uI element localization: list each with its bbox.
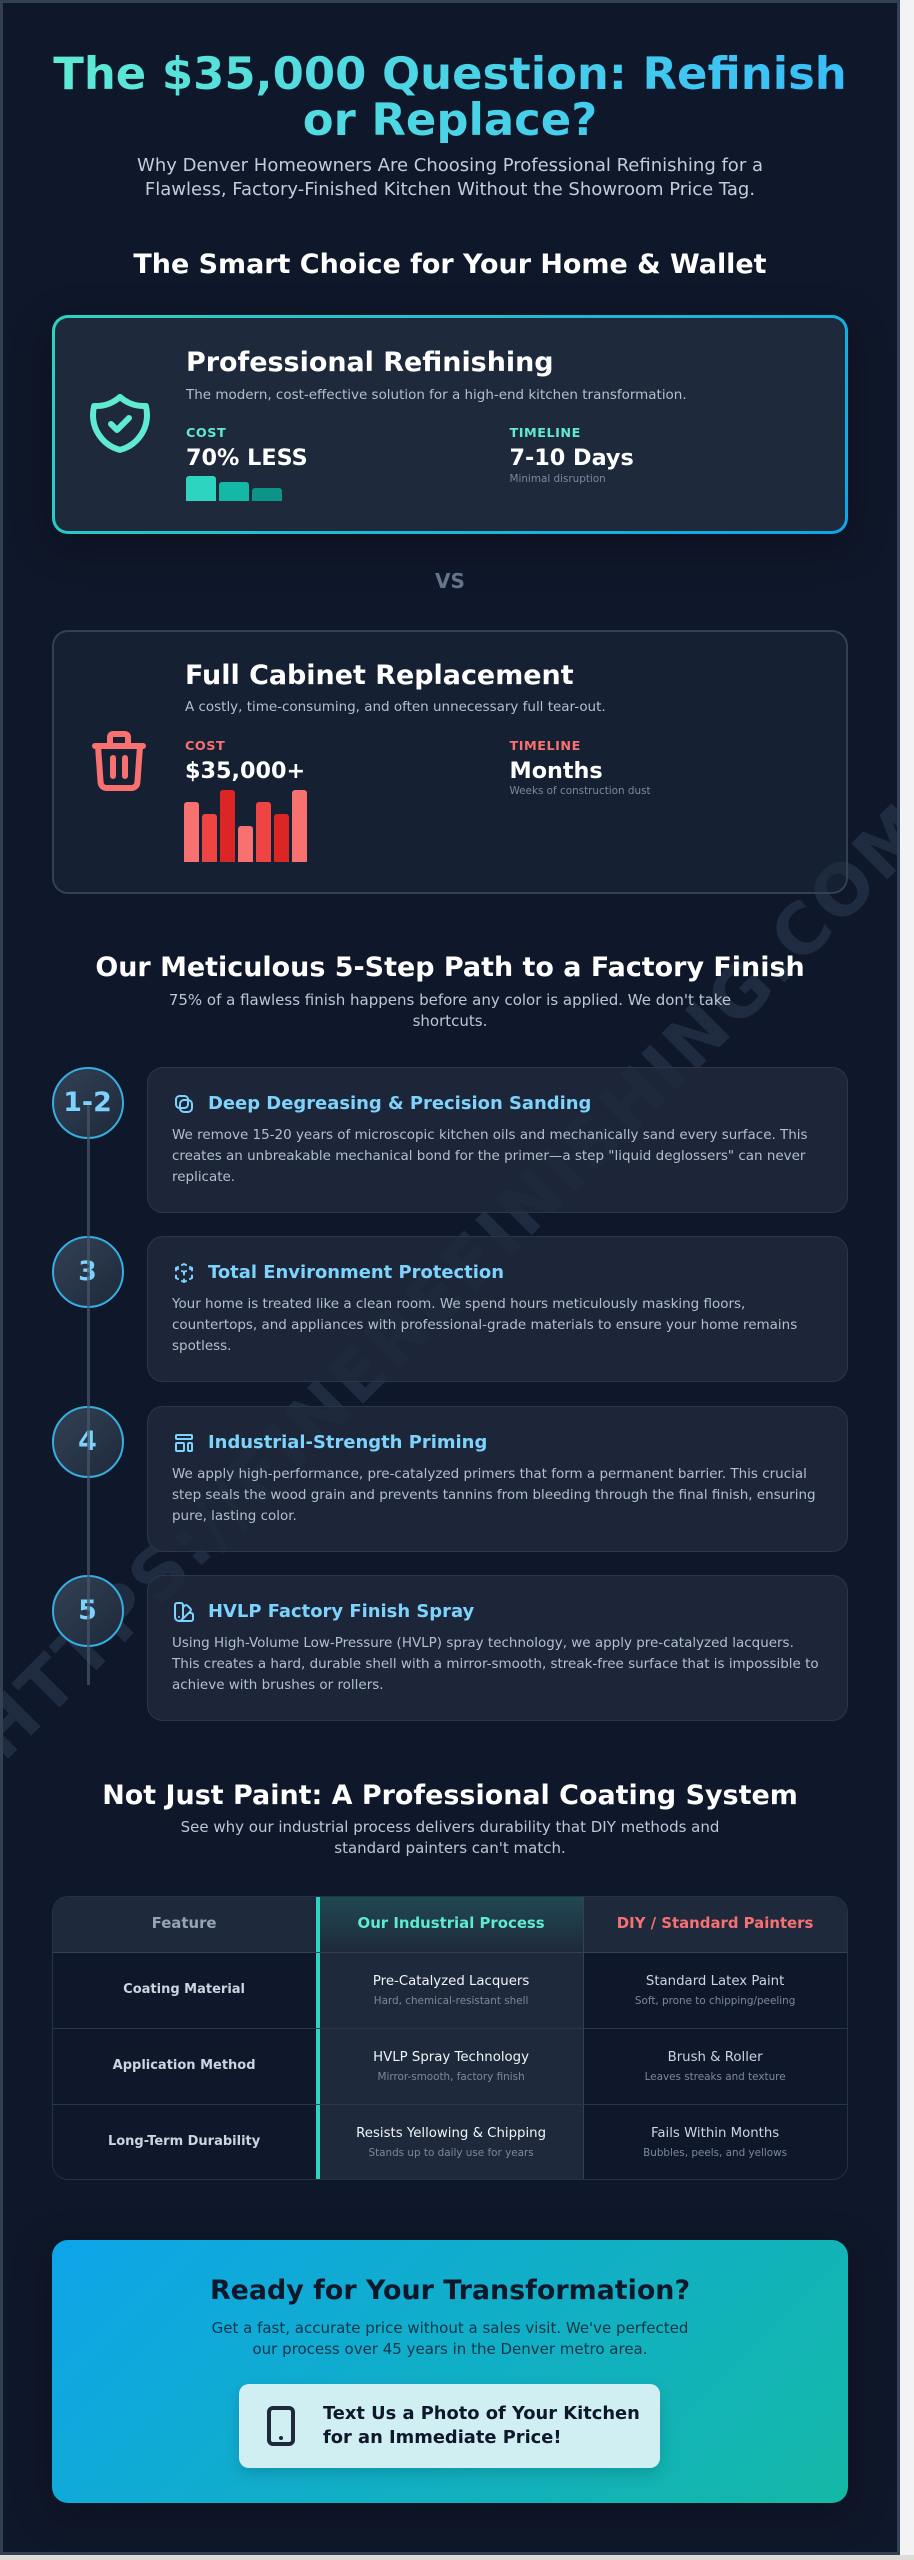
heading: 5-step path: Our Meticulous 5-Step Path to a Factory Finish xyxy=(95,952,805,983)
5-step subtitle xyxy=(169,991,731,1030)
panel: step 3 xyxy=(147,1236,848,1382)
header row background xyxy=(53,1897,848,1953)
refinishing cost label: COST xyxy=(186,426,226,441)
cta text: our process over 45 years in the Denver metro area. xyxy=(252,2340,648,2358)
header: feature: Feature xyxy=(152,1914,217,1932)
header: our process: Our Industrial Process xyxy=(358,1914,545,1932)
step 4 title: Industrial-Strength Priming xyxy=(208,1432,487,1453)
row label: durability: Long-Term Durability xyxy=(108,2134,260,2149)
step 1-2 number: 1-2 xyxy=(63,1087,112,1118)
refinishing cost value: 70% LESS xyxy=(186,445,308,471)
title xyxy=(52,50,848,142)
step 3 number: 3 xyxy=(78,1256,97,1287)
vs label: VS xyxy=(435,569,465,593)
title: The $35,000 Question: Refinish xyxy=(53,46,847,100)
replacement timeline label: TIMELINE xyxy=(510,739,581,754)
panel: step 1-2 xyxy=(147,1067,848,1213)
replacement timeline note: Weeks of construction dust xyxy=(510,785,651,797)
step 3 text xyxy=(172,1296,797,1354)
icon: phone xyxy=(267,2406,295,2446)
panel: call to action xyxy=(52,2240,848,2503)
row divider 1 xyxy=(53,1952,848,1953)
subtitle: Why Denver Homeowners Are Choosing Professional Refinishing for a xyxy=(137,155,763,176)
cell note: brush: Leaves streaks and texture xyxy=(645,2071,786,2083)
refinishing description: The modern, cost-effective solution for a high-end kitchen transformation. xyxy=(186,387,687,403)
cta text xyxy=(212,2319,688,2358)
replacement description: A costly, time-consuming, and often unnecessary full tear-out. xyxy=(185,699,606,715)
icon: template xyxy=(175,1434,193,1452)
cell: fails: Fails Within Months xyxy=(651,2126,779,2141)
replacement cost bars xyxy=(184,790,307,862)
step 1-2 title: Deep Degreasing & Precision Sanding xyxy=(208,1093,591,1114)
comparison table xyxy=(52,1896,848,2180)
panel: professional refinishing xyxy=(52,315,848,534)
cell: hvlp: HVLP Spray Technology xyxy=(373,2050,529,2065)
step 4 text: step seals the wood grain and prevents tannins from bleeding through the final finish, ensuring xyxy=(172,1487,816,1503)
cell note: lacquers: Hard, chemical-resistant shell xyxy=(374,1995,528,2007)
timeline line xyxy=(87,1105,90,1685)
icon: cube transparent xyxy=(175,1263,193,1283)
icon: color swatch xyxy=(174,1602,194,1622)
step 3 text: countertops, and appliances with professional-grade materials to ensure your home remains xyxy=(172,1317,797,1333)
step 3 text: spotless. xyxy=(172,1338,231,1354)
heading: coating system: Not Just Paint: A Professional Coating System xyxy=(102,1780,798,1811)
replacement cost label: COST xyxy=(185,739,225,754)
cell: brush: Brush & Roller xyxy=(668,2050,763,2065)
button text: for an Immediate Price! xyxy=(323,2427,562,2448)
step 1-2 text: creates an unbreakable mechanical bond for the primer—a step "liquid deglossers" can never xyxy=(172,1148,805,1164)
step 3 title: Total Environment Protection xyxy=(208,1262,504,1283)
icon: overlapping squares xyxy=(175,1095,193,1113)
step 4 number xyxy=(52,1406,124,1478)
coating subtitle: standard painters can't match. xyxy=(334,1839,566,1857)
replacement cost value: $35,000+ xyxy=(185,758,305,784)
column divider xyxy=(583,1897,584,2179)
panel: step 4 xyxy=(147,1406,848,1552)
bottom strip xyxy=(0,2555,914,2560)
refinishing cost bars xyxy=(186,476,282,501)
heading: smart choice: The Smart Choice for Your Home & Wallet xyxy=(133,249,767,280)
refinishing timeline value: 7-10 Days xyxy=(510,445,634,471)
5-step subtitle: shortcuts. xyxy=(413,1012,487,1030)
panel: step 5 xyxy=(147,1575,848,1721)
panel: full cabinet replacement xyxy=(52,630,848,894)
refinishing heading: Professional Refinishing xyxy=(186,347,554,378)
step 4 text: pure, lasting color. xyxy=(172,1508,297,1524)
step 4 text: We apply high-performance, pre-catalyzed primers that form a permanent barrier. This crucial xyxy=(172,1466,807,1482)
step 1-2 number xyxy=(52,1067,124,1139)
replacement timeline value: Months xyxy=(510,758,603,784)
coating subtitle: See why our industrial process delivers durability that DIY methods and xyxy=(181,1818,719,1836)
coating subtitle xyxy=(181,1818,719,1857)
step 5 number xyxy=(52,1575,124,1647)
cell: lacquers: Pre-Catalyzed Lacquers xyxy=(373,1974,529,1989)
subtitle: Flawless, Factory-Finished Kitchen Without the Showroom Price Tag. xyxy=(145,179,755,200)
subtitle xyxy=(137,155,763,200)
cell: resists: Resists Yellowing & Chipping xyxy=(356,2126,546,2141)
refinishing timeline note: Minimal disruption xyxy=(510,473,606,485)
highlighted column header tint xyxy=(320,1897,583,1953)
button text: Text Us a Photo of Your Kitchen xyxy=(323,2403,640,2424)
header: diy: DIY / Standard Painters xyxy=(617,1914,813,1932)
step 5 text: This creates a hard, durable shell with a mirror-smooth, streak-free surface that is impossible to xyxy=(172,1656,819,1672)
button text xyxy=(323,2403,640,2448)
step 1-2 text: We remove 15-20 years of microscopic kitchen oils and mechanically sand every surface. This xyxy=(172,1127,808,1143)
icon: shield check xyxy=(90,394,150,453)
row label: coating material: Coating Material xyxy=(123,1982,245,1997)
icon: trash xyxy=(92,731,146,791)
title: or Replace? xyxy=(303,92,597,146)
step 3 text: Your home is treated like a clean room. We spend hours meticulously masking floors, xyxy=(172,1296,745,1312)
cell: latex: Standard Latex Paint xyxy=(646,1974,784,1989)
step 3 number xyxy=(52,1236,124,1308)
cell note: resists: Stands up to daily use for years xyxy=(368,2147,534,2159)
step 5 number: 5 xyxy=(78,1595,97,1626)
highlighted column xyxy=(316,1897,583,2179)
cta button xyxy=(239,2384,660,2468)
row label: application method: Application Method xyxy=(113,2058,256,2073)
step 4 text xyxy=(172,1466,816,1524)
cell note: fails: Bubbles, peels, and yellows xyxy=(643,2147,787,2159)
row divider 2 xyxy=(53,2028,848,2029)
5-step subtitle: 75% of a flawless finish happens before any color is applied. We don't take xyxy=(169,991,731,1009)
step 1-2 text: replicate. xyxy=(172,1169,235,1185)
cta heading: Ready for Your Transformation? xyxy=(210,2275,690,2306)
step 5 text xyxy=(172,1635,819,1693)
row divider 3 xyxy=(53,2104,848,2105)
step 5 text: Using High-Volume Low-Pressure (HVLP) spray technology, we apply pre-catalyzed lacquers. xyxy=(172,1635,794,1651)
cta text: Get a fast, accurate price without a sales visit. We've perfected xyxy=(212,2319,688,2337)
cell note: hvlp: Mirror-smooth, factory finish xyxy=(378,2071,525,2083)
refinishing timeline label: TIMELINE xyxy=(510,426,581,441)
step 5 text: achieve with brushes or rollers. xyxy=(172,1677,384,1693)
step 1-2 text xyxy=(172,1127,808,1185)
step 4 number: 4 xyxy=(78,1426,97,1457)
cell note: latex: Soft, prone to chipping/peeling xyxy=(635,1995,795,2007)
step 5 title: HVLP Factory Finish Spray xyxy=(208,1601,474,1622)
replacement heading: Full Cabinet Replacement xyxy=(185,660,574,691)
